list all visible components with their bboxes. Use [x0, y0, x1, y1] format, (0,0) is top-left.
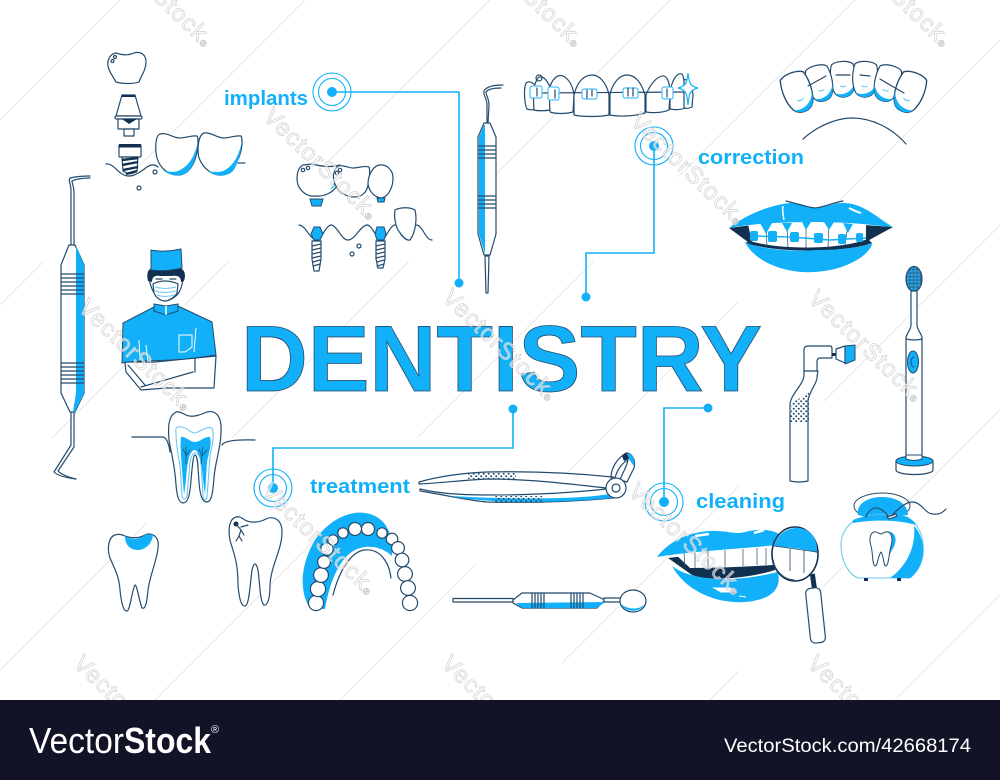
icon: denture [303, 513, 418, 611]
icon: dental floss box [841, 493, 946, 581]
connector: cleaning [664, 404, 712, 502]
target marker: implants [313, 73, 351, 111]
watermarks: VectorStock® [73, 294, 198, 416]
label: cleaning: cleaning [696, 491, 785, 513]
title: DENTISTRY [241, 306, 762, 411]
icon: extraction forceps [419, 453, 635, 502]
label: correction: correction [698, 147, 804, 169]
icon: polishing handpiece [790, 345, 855, 482]
icon: tooth cross section [132, 412, 255, 503]
icon: dental implant exploded view [106, 52, 245, 190]
icon: dental mirror [453, 590, 646, 612]
icon: tooth with cavity [108, 534, 158, 611]
label: treatment: treatment [310, 476, 410, 498]
icon: dental probe, left [54, 176, 90, 479]
icon: braces on teeth [524, 73, 698, 116]
watermarks: VectorStock® [802, 650, 927, 772]
footer logo: ® [211, 724, 219, 736]
connector: correction [582, 146, 654, 302]
icon: dental probe, top centre [478, 85, 503, 293]
connector: implants [332, 92, 464, 288]
watermarks: VectorStock® [623, 478, 748, 600]
footer logo: VectorStock [29, 720, 222, 761]
icon: upper tooth arch [777, 61, 930, 144]
connector: treatment [273, 404, 518, 488]
icon: implant bridge [297, 164, 432, 271]
target marker: cleaning [645, 483, 683, 521]
label: implants: implants [224, 88, 308, 110]
watermarks: VectorStock® [803, 285, 928, 407]
footer bar [0, 700, 1000, 780]
watermarks: VectorStock® [258, 103, 383, 225]
watermarks: VectorStock® [68, 650, 193, 772]
icon: smile with braces [729, 201, 893, 272]
watermarks: VectorStock® [436, 650, 561, 772]
icon: electric toothbrush [896, 266, 933, 474]
target marker: treatment [254, 469, 292, 507]
target marker: correction [635, 127, 673, 165]
icon: smile with mirror [657, 527, 826, 644]
watermarks: VectorStock® [437, 284, 562, 406]
icon: dentist [122, 249, 216, 390]
icon: cracked tooth [229, 517, 282, 606]
watermarks: VectorStock® [256, 478, 381, 600]
footer image id: VectorStock.com/42668174 [724, 736, 971, 757]
watermarks: VectorStock® [625, 108, 750, 230]
